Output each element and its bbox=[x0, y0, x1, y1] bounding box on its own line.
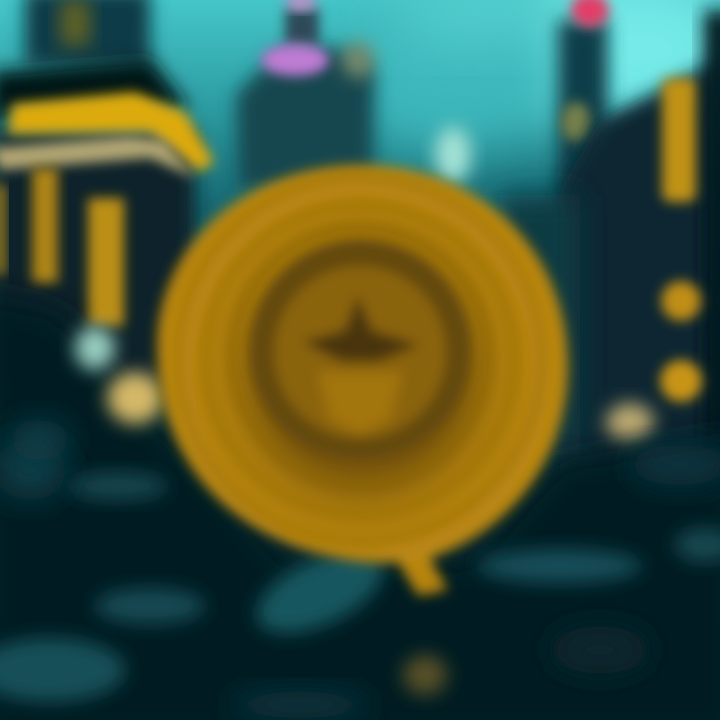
yellow columns bbox=[0, 185, 5, 275]
coin: large golden coin bbox=[157, 165, 568, 596]
city: left tower with yellow roof bbox=[0, 0, 214, 380]
yellow roof bbox=[8, 92, 214, 172]
coin centre emblem bbox=[250, 240, 470, 460]
pale roof band bbox=[0, 136, 195, 178]
coin rings bbox=[178, 178, 542, 542]
city: centre tower with pink top bbox=[236, 0, 471, 190]
city: right towers with lights bbox=[500, 0, 720, 470]
rubble: dark foreground with teal shards bbox=[0, 290, 720, 720]
